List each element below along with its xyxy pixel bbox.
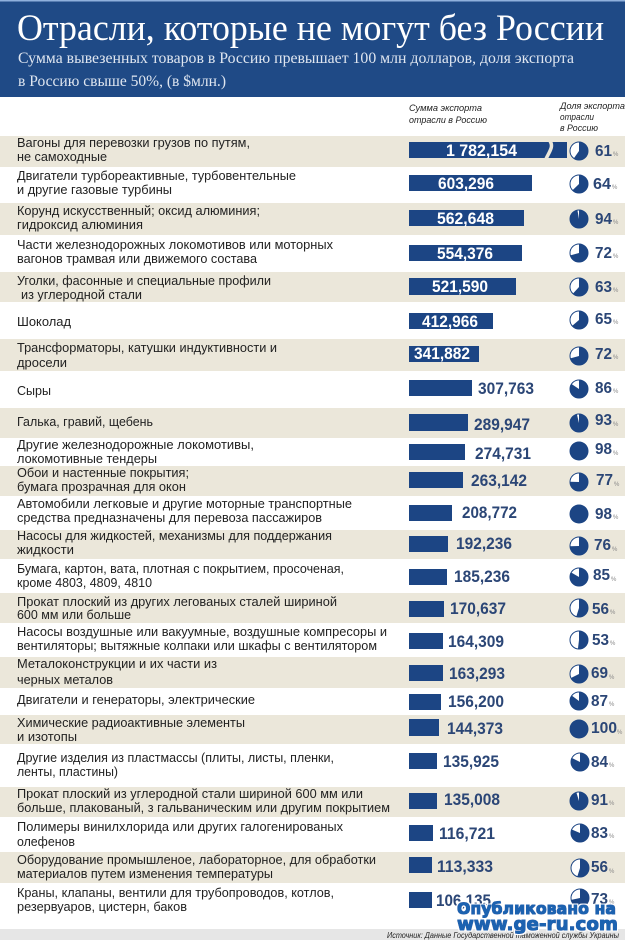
row 17: 69 bbox=[591, 665, 608, 682]
row 13: 192,236 bbox=[456, 535, 512, 553]
row 2: 64 bbox=[593, 176, 611, 193]
row 12: средства предназначены для перевоза пассажиров bbox=[17, 510, 322, 525]
row 22: 116,721 bbox=[439, 825, 495, 843]
row 18 bbox=[17, 692, 615, 711]
row 16: вентиляторы; вытяжные колпаки или шкафы с вентилятором bbox=[17, 638, 377, 653]
row 13: 76 bbox=[594, 537, 611, 554]
subtitle bbox=[18, 50, 574, 90]
row 18: 87 bbox=[591, 693, 608, 710]
row 14: Бумага, картон, вата, плотная с покрытием, просоченая, bbox=[17, 561, 344, 576]
row 5: 63 bbox=[595, 279, 612, 296]
row 20 bbox=[17, 750, 615, 779]
row 5: 521,590 bbox=[432, 278, 488, 296]
row 6: % bbox=[613, 320, 619, 326]
row 6: 65 bbox=[595, 311, 612, 328]
row 24: 106,135 bbox=[436, 892, 491, 910]
row 17 bbox=[0, 656, 625, 688]
column heading: export sum: Сумма экспорта bbox=[409, 103, 482, 114]
row 2: Двигатели турбореактивные, турбовентельные bbox=[17, 168, 296, 183]
row 19: Химические радиоактивные элементы bbox=[17, 715, 245, 730]
column heading: export share: отрасли bbox=[560, 112, 595, 123]
row 1: Вагоны для перевозки грузов по путям, bbox=[17, 135, 250, 150]
row 13: Насосы для жидкостей, механизмы для поддержания bbox=[17, 528, 332, 543]
row 20: ленты, пластины) bbox=[17, 764, 118, 779]
row 19: и изотопы bbox=[17, 729, 77, 744]
row 2: и другие газовые турбины bbox=[17, 182, 172, 197]
row 1: не самоходные bbox=[17, 149, 107, 164]
row 9: 289,947 bbox=[474, 416, 530, 434]
row 7: 341,882 bbox=[414, 345, 470, 363]
row 22: олефенов bbox=[17, 834, 75, 849]
row 22: % bbox=[609, 834, 615, 840]
row 3: гидроксид алюминия bbox=[17, 217, 143, 232]
row 14 bbox=[17, 561, 617, 590]
row 14: % bbox=[611, 577, 617, 583]
row 23: материалов путем изменения температуры bbox=[17, 866, 273, 881]
row 20: 84 bbox=[591, 754, 608, 771]
row 23: 56 bbox=[591, 859, 608, 876]
row 24: резервуаров, цистерн, баков bbox=[17, 899, 187, 914]
row 9 bbox=[0, 408, 625, 438]
header banner bbox=[0, 0, 625, 97]
row 8: Сыры bbox=[17, 383, 51, 398]
row 5: из углеродной стали bbox=[21, 287, 142, 302]
row 12: % bbox=[613, 515, 619, 521]
row 16: 164,309 bbox=[448, 633, 504, 651]
row 20: Другие изделия из пластмассы (плиты, листы, пленки, bbox=[17, 750, 334, 765]
row 12: 98 bbox=[595, 506, 612, 523]
row 19: % bbox=[617, 730, 623, 736]
row 10: 274,731 bbox=[475, 445, 531, 463]
row 15: % bbox=[610, 610, 616, 616]
row 13 bbox=[0, 528, 625, 559]
row 19: 100 bbox=[591, 720, 617, 737]
row 4 bbox=[17, 237, 619, 266]
row 10: Другие железнодорожные локомотивы, bbox=[17, 437, 254, 452]
column heading: export share: в Россию bbox=[560, 123, 598, 134]
row 16 bbox=[17, 624, 616, 653]
row 7: 72 bbox=[595, 346, 612, 363]
row 15: 56 bbox=[592, 601, 609, 618]
row 5 bbox=[0, 272, 625, 302]
column heading: export sum bbox=[409, 103, 487, 126]
row 7: дросели bbox=[17, 355, 67, 370]
row 6: 412,966 bbox=[422, 313, 478, 331]
row 19: 144,373 bbox=[447, 720, 503, 738]
row 24: Краны, клапаны, вентили для трубопроводов, котлов, bbox=[17, 885, 334, 900]
row 11 bbox=[0, 465, 625, 496]
row 11: бумага прозрачная для окон bbox=[17, 479, 186, 494]
row 3: Корунд искусственный; оксид алюминия; bbox=[17, 203, 260, 218]
row 15: 600 мм или больше bbox=[17, 607, 131, 622]
row 22 bbox=[17, 819, 615, 849]
row 10: локомотивные тендеры bbox=[17, 451, 157, 466]
row 22: Полимеры винилхлорида или других галогенированых bbox=[17, 819, 343, 834]
row 18: 156,200 bbox=[448, 693, 504, 711]
row 23: % bbox=[609, 869, 615, 875]
row 20: 135,925 bbox=[443, 753, 499, 771]
row 15: Прокат плоский из других легованых сталей шириной bbox=[17, 594, 337, 609]
row 7: % bbox=[613, 355, 619, 361]
row 9: % bbox=[613, 422, 619, 428]
row 3: % bbox=[613, 220, 619, 226]
row 14: кроме 4803, 4809, 4810 bbox=[17, 575, 152, 590]
row 7 bbox=[0, 339, 625, 371]
row 9: 93 bbox=[595, 412, 612, 429]
row 4: 72 bbox=[595, 245, 612, 262]
row 5: Уголки, фасонные и специальные профили bbox=[17, 273, 271, 288]
subtitle: в Россию свыше 50%, (в $млн.) bbox=[18, 73, 226, 90]
row 11: 77 bbox=[596, 472, 613, 489]
row 14: 85 bbox=[593, 567, 610, 584]
row 23: Оборудование промышленое, лабораторное, для обработки bbox=[17, 852, 376, 867]
row 21: % bbox=[609, 801, 615, 807]
row 21: Прокат плоский из углеродной стали шириной 600 мм или bbox=[17, 786, 363, 801]
row 4: % bbox=[613, 254, 619, 260]
row 17: 163,293 bbox=[449, 665, 505, 683]
row 1 bbox=[0, 135, 625, 167]
column heading: export sum: отрасли в Россию bbox=[409, 115, 487, 126]
row 13: жидкости bbox=[17, 542, 74, 557]
row 1: 61 bbox=[595, 143, 612, 160]
row 1: % bbox=[613, 152, 619, 158]
row 8: 307,763 bbox=[478, 380, 534, 398]
row 21 bbox=[0, 786, 625, 817]
row 23: 113,333 bbox=[437, 858, 493, 876]
row 8 bbox=[17, 380, 619, 398]
watermark bbox=[457, 899, 618, 935]
row 21: 135,008 bbox=[444, 791, 500, 809]
row 6: Шоколад bbox=[17, 314, 71, 329]
row 4: вагонов трамвая или движемого состава bbox=[17, 251, 258, 266]
row 18: Двигатели и генераторы, электрические bbox=[17, 692, 255, 707]
row 16: % bbox=[610, 641, 616, 647]
row 3: 94 bbox=[595, 211, 612, 228]
row 5: % bbox=[613, 288, 619, 294]
row 19 bbox=[0, 715, 625, 744]
row 12 bbox=[17, 496, 619, 525]
row 23 bbox=[0, 852, 625, 883]
row 8: % bbox=[613, 389, 619, 395]
row 15: 170,637 bbox=[450, 600, 506, 618]
row 11: Обои и настенные покрытия; bbox=[17, 465, 189, 480]
row 10: % bbox=[613, 451, 619, 457]
row 21: больше, плакованый, з гальваническим или другим покрытием bbox=[17, 800, 390, 815]
row 2: % bbox=[612, 185, 618, 191]
row 13: % bbox=[612, 547, 618, 553]
row 10: 98 bbox=[595, 441, 612, 458]
row 2: 603,296 bbox=[438, 175, 494, 193]
title: Отрасли, которые не могут без России bbox=[17, 8, 604, 49]
watermark: Опубликовано на bbox=[457, 899, 616, 918]
row 14: 185,236 bbox=[454, 568, 510, 586]
row 4: Части железнодорожных локомотивов или моторных bbox=[17, 237, 333, 252]
row 11: 263,142 bbox=[471, 472, 527, 490]
row 6 bbox=[17, 311, 619, 331]
row 4: 554,376 bbox=[437, 245, 493, 263]
row 9: Галька, гравий, щебень bbox=[17, 414, 153, 429]
row 1: 1 782,154 bbox=[446, 142, 518, 160]
row 22: 83 bbox=[591, 825, 608, 842]
row 17: Металоконструкции и их части из bbox=[17, 656, 217, 671]
row 24: % bbox=[609, 900, 615, 906]
row 12: Автомобили легковые и другие моторные транспортные bbox=[17, 496, 352, 511]
row 8: 86 bbox=[595, 380, 612, 397]
row 11: % bbox=[614, 482, 620, 488]
row 16: 53 bbox=[592, 632, 609, 649]
row 7: Трансформаторы, катушки индуктивности и bbox=[17, 340, 277, 355]
row 2 bbox=[17, 168, 618, 197]
subtitle: Сумма вывезенных товаров в Россию превышает 100 млн долларов, доля экспорта bbox=[18, 50, 574, 67]
footer source band bbox=[0, 929, 625, 940]
row 3 bbox=[0, 203, 625, 235]
row 24 bbox=[17, 885, 615, 914]
column heading: export share bbox=[559, 101, 625, 134]
row 12: 208,772 bbox=[462, 504, 517, 522]
row 16: Насосы воздушные или вакуумные, воздушные компресоры и bbox=[17, 624, 387, 639]
row 21: 91 bbox=[591, 792, 608, 809]
row 10 bbox=[17, 437, 619, 466]
row 15 bbox=[0, 593, 625, 623]
row 20: % bbox=[609, 763, 615, 769]
watermark: www.ge-ru.com bbox=[457, 914, 618, 935]
row 3: 562,648 bbox=[437, 210, 494, 228]
row 24: 73 bbox=[591, 891, 608, 908]
row 17: % bbox=[609, 675, 615, 681]
row 18: % bbox=[609, 702, 615, 708]
row 17: черных металов bbox=[17, 672, 113, 687]
